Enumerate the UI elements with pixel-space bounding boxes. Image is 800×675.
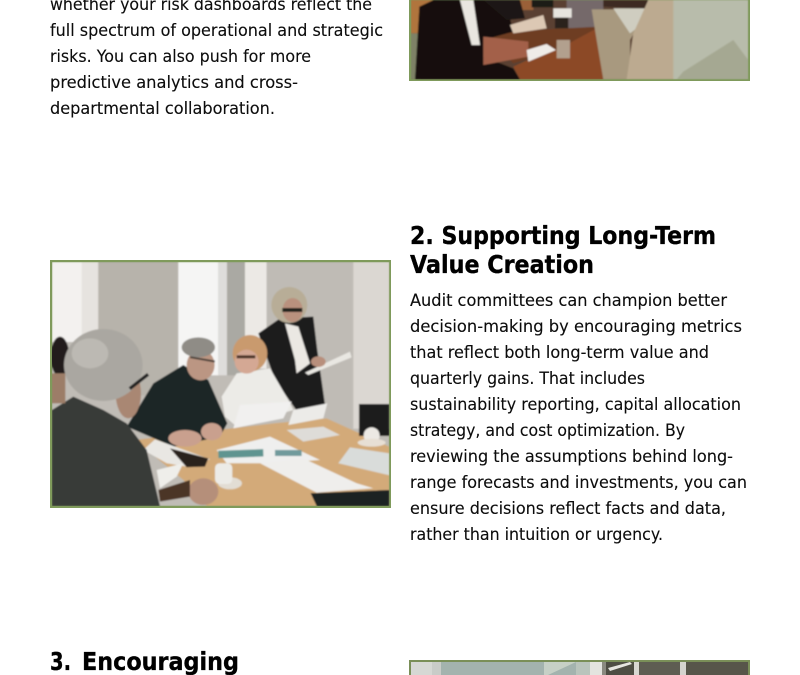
back-turned man [51, 329, 218, 506]
standing woman [258, 287, 352, 411]
papers [143, 402, 389, 506]
photo: team reviewing documents around a table [50, 260, 391, 508]
photo: boardroom meeting, cropped at top [409, 0, 750, 81]
text block: section 1 closing paragraph: full spectrum of operational and strategic [50, 21, 383, 41]
text block: section 1 closing paragraph: predictive analytics and cross- [50, 73, 298, 93]
heading: section 2 [410, 221, 716, 279]
text block: section 2 paragraph: quarterly gains. That includes [410, 369, 645, 389]
text block: section 2 paragraph: rather than intuition or urgency. [410, 525, 663, 545]
heading: section 2: Value Creation [410, 250, 594, 279]
text block: section 2 paragraph: ensure decisions reflect facts and data, [410, 499, 726, 519]
seated woman [222, 335, 293, 427]
photo: office interior, cropped at bottom [409, 660, 750, 675]
heading: section 2: 2. Supporting Long-Term [410, 221, 716, 250]
text block: section 2 paragraph: Audit committees can champion better [410, 291, 727, 311]
text block: section 2 paragraph: decision-making by encouraging metrics [410, 317, 742, 337]
text block: section 2 paragraph: sustainability reporting, capital allocation [410, 395, 741, 415]
text block: section 2 paragraph: range forecasts and investments, you can [410, 473, 747, 493]
text block: section 2 paragraph: that reflect both long-term value and [410, 343, 709, 363]
text block: section 2 paragraph: reviewing the assumptions behind long- [410, 447, 733, 467]
table [135, 418, 389, 506]
text block: section 1 closing paragraph [50, 0, 383, 119]
text block: section 1 closing paragraph: risks. You can also push for more [50, 47, 311, 67]
text block: section 1 closing paragraph: departmental collaboration. [50, 99, 275, 119]
chair [359, 404, 389, 436]
seated man [127, 337, 227, 447]
text block: section 2 paragraph [410, 291, 747, 545]
text block: section 2 paragraph: strategy, and cost optimization. By [410, 421, 685, 441]
